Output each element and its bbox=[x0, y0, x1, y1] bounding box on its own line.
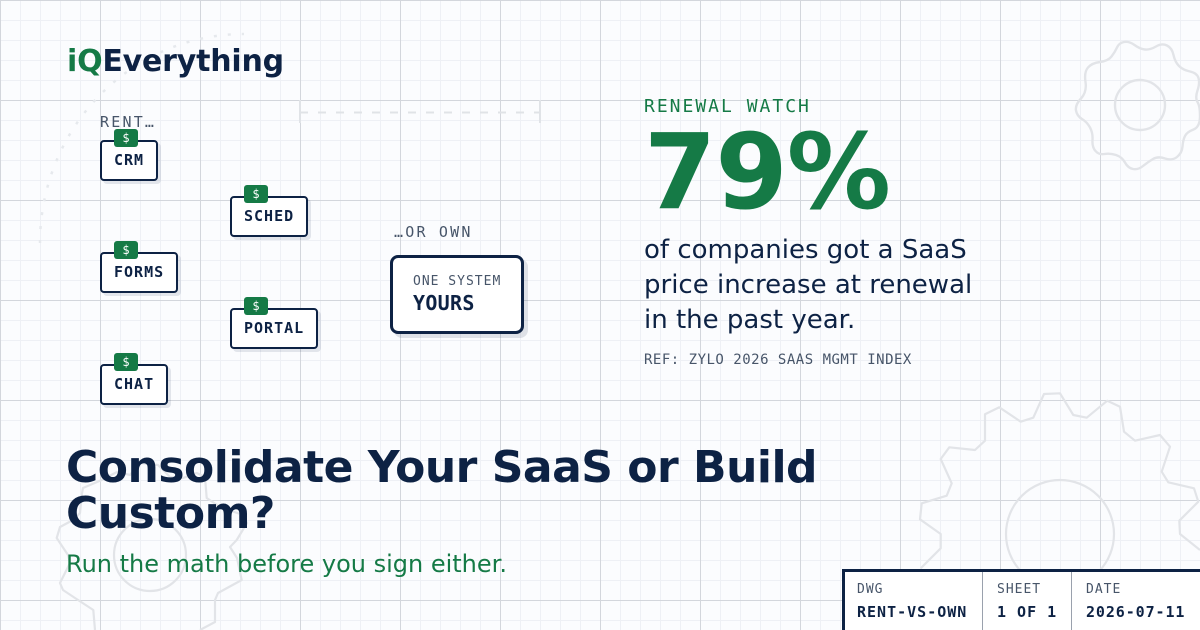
SaaS box: FORMS bbox=[100, 252, 178, 293]
gear: bottom right bbox=[920, 393, 1200, 588]
stat description bbox=[644, 235, 972, 335]
gear: bottom left bbox=[57, 463, 247, 630]
title block cell: date bbox=[1086, 582, 1185, 621]
headline: Custom? bbox=[66, 488, 275, 539]
text: $ bbox=[122, 355, 130, 369]
stat description: of companies got a SaaS bbox=[644, 235, 967, 265]
stat description: price increase at renewal bbox=[644, 270, 972, 300]
title block cell: date: 2026-07-11 bbox=[1086, 603, 1185, 621]
text: $ bbox=[122, 131, 130, 145]
SaaS box: CRM: CRM bbox=[114, 151, 144, 169]
title block bbox=[842, 569, 1200, 630]
headline bbox=[66, 442, 817, 539]
SaaS box: SCHED: SCHED bbox=[244, 207, 294, 225]
title block cell: sheet: SHEET bbox=[997, 582, 1041, 597]
SaaS box: PORTAL bbox=[230, 308, 318, 349]
title block cell: date: DATE bbox=[1086, 582, 1121, 597]
stat number: 79% bbox=[644, 111, 890, 233]
stat source: REF: ZYLO 2026 SAAS MGMT INDEX bbox=[644, 352, 912, 368]
text: $ bbox=[252, 187, 260, 201]
stat panel bbox=[644, 96, 972, 368]
own box: one system: YOURS bbox=[413, 291, 475, 315]
own box: one system: ONE SYSTEM bbox=[413, 274, 501, 289]
label: rent: RENT… bbox=[100, 113, 156, 131]
SaaS box: PORTAL: PORTAL bbox=[244, 319, 304, 337]
gear: top right bbox=[1076, 42, 1200, 169]
SaaS box: CHAT: CHAT bbox=[114, 375, 154, 393]
headline: Consolidate Your SaaS or Build bbox=[66, 442, 817, 493]
subheadline: Run the math before you sign either. bbox=[66, 550, 507, 578]
title block cell: drawing: RENT-VS-OWN bbox=[857, 603, 967, 621]
stat eyebrow: RENEWAL WATCH bbox=[644, 96, 811, 117]
own box: one system bbox=[390, 255, 524, 334]
SaaS box: CHAT bbox=[100, 364, 168, 405]
dimension line bbox=[300, 100, 540, 123]
SaaS box: FORMS: FORMS bbox=[114, 263, 164, 281]
brand logo: iQEverything bbox=[67, 44, 284, 79]
text: $ bbox=[122, 243, 130, 257]
title block cell: sheet: 1 OF 1 bbox=[997, 603, 1057, 621]
dotted arc bbox=[40, 34, 244, 243]
SaaS box: CRM bbox=[100, 140, 158, 181]
stat description: in the past year. bbox=[644, 305, 855, 335]
text: $ bbox=[252, 299, 260, 313]
SaaS box: SCHED bbox=[230, 196, 308, 237]
title block cell: drawing bbox=[845, 572, 983, 630]
title block cell: drawing: DWG bbox=[857, 582, 883, 597]
title block cell: sheet bbox=[983, 572, 1072, 630]
label: or own: …OR OWN bbox=[394, 223, 473, 241]
